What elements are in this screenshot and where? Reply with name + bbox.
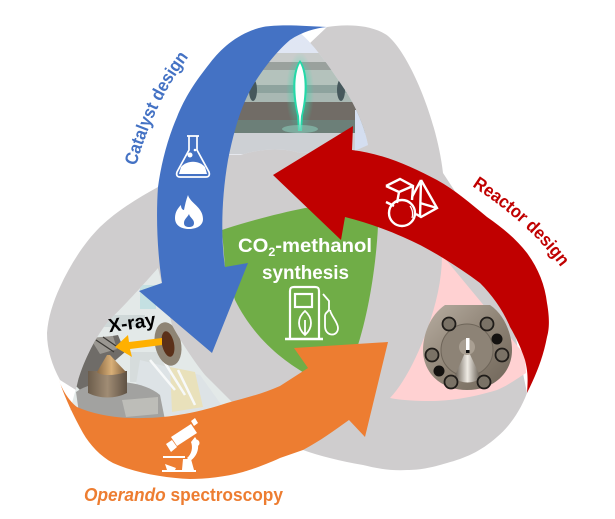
icon: biofuel pump — [285, 287, 338, 339]
central green panel — [222, 205, 378, 375]
label: Catalyst design — [136, 55, 190, 166]
heading: CO2-methanol synthesis: CO — [238, 235, 267, 257]
icon: microscope — [162, 418, 200, 472]
icon: cube, cone and sphere — [386, 179, 437, 226]
heading: CO2-methanol synthesis: 2 — [268, 245, 276, 259]
blue arrow: catalyst design — [139, 25, 327, 353]
orange arrow: operando spectroscopy — [59, 342, 388, 479]
icon: flask — [177, 136, 209, 177]
pink reactor backdrop — [390, 255, 526, 401]
heading: CO2-methanol synthesis: -methanol — [275, 235, 372, 257]
infographic: CO2-methanol synthesis cycle — [47, 25, 567, 505]
grey trefoil background — [47, 25, 527, 470]
reactor photo: nozzle block — [423, 305, 512, 390]
label: Operando spectroscopy: Operando spectroscopy — [84, 485, 283, 505]
red arrow: reactor design — [273, 126, 549, 393]
icon: flame — [175, 195, 203, 229]
photo: plasma flame in reactor — [229, 34, 368, 155]
infographic: CO2-methanol synthesis cycle: Catalyst design — [126, 53, 188, 164]
label: Reactor design — [472, 186, 560, 266]
photo: X-ray beamline setup — [70, 268, 232, 418]
X-ray source flange — [154, 322, 182, 366]
heading: CO2-methanol synthesis: synthesis — [262, 262, 349, 284]
X-ray label: X-ray — [107, 310, 157, 337]
yellow X-ray arrow — [115, 335, 162, 357]
heading: CO2-methanol synthesis — [238, 235, 372, 284]
infographic: CO2-methanol synthesis cycle: Reactor design — [473, 176, 567, 266]
